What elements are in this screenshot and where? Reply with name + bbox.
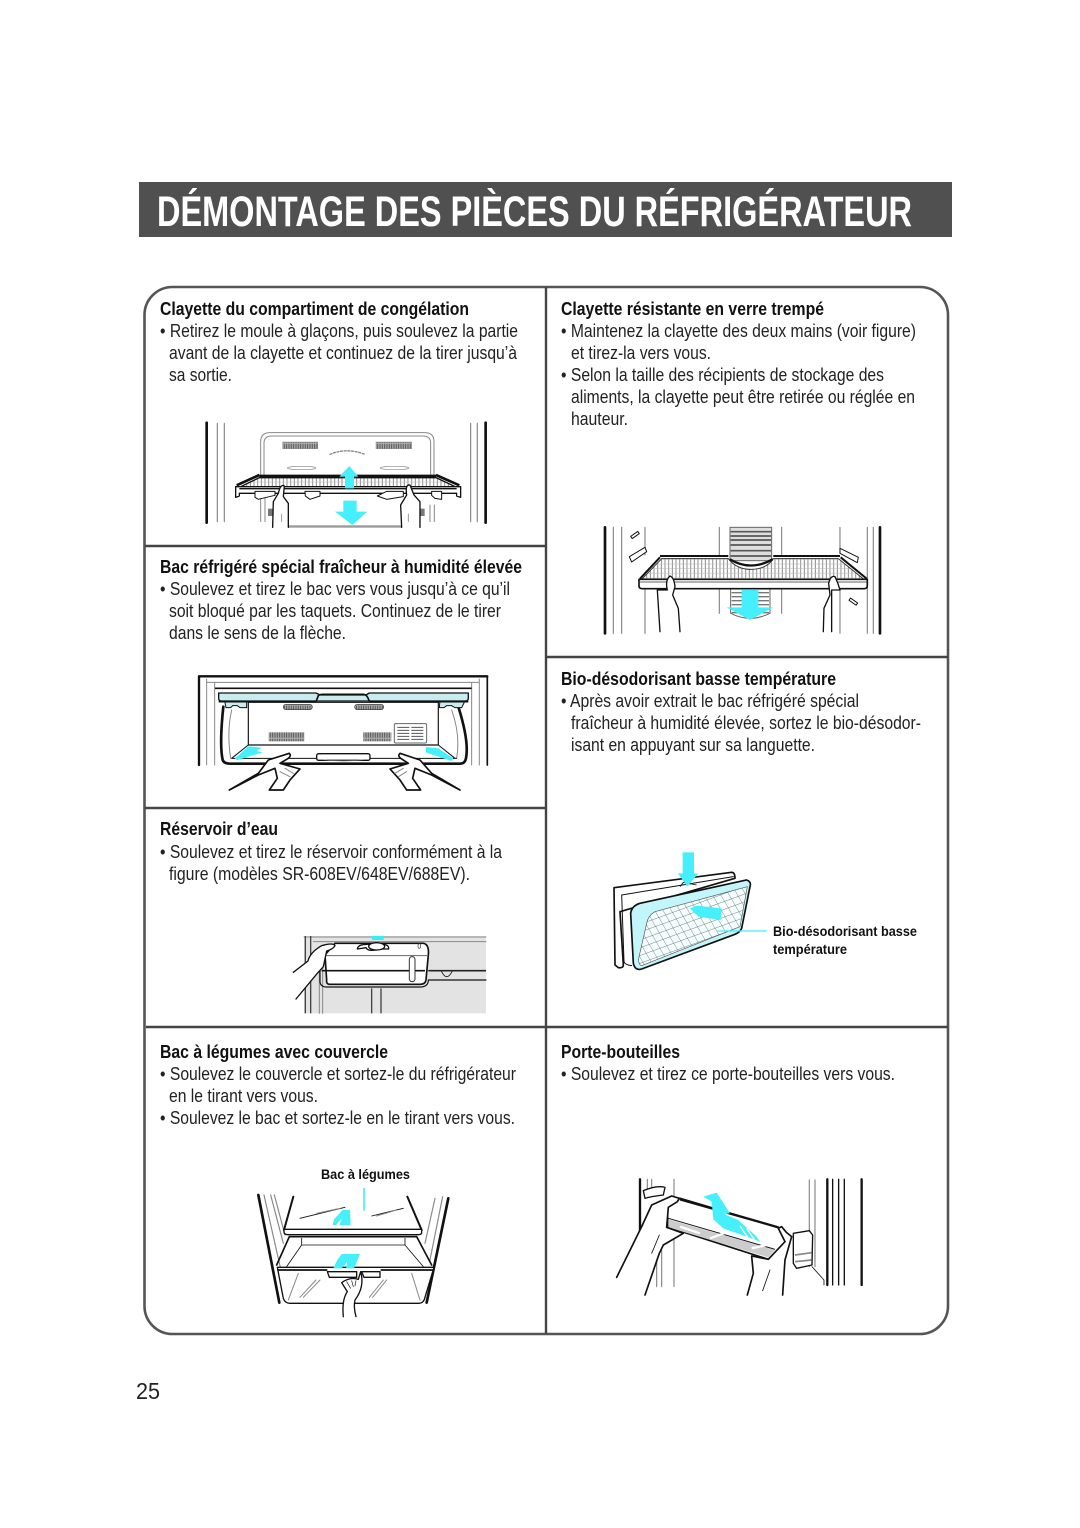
- text block: crisper bin instructions: dans le sens de la flèche.: [169, 623, 346, 643]
- text block: vegetable drawer instructions: • Soulevez le couvercle et sortez-le du réfrigérateur: [160, 1064, 516, 1084]
- panel: bottle holder: [561, 1042, 895, 1295]
- callout: vegetable drawer label: Bac à légumes: [321, 1166, 410, 1182]
- text block: water tank instructions: [160, 842, 503, 884]
- heading: freezer shelf: Clayette du compartiment de congélation: [160, 299, 469, 319]
- panel: freezer shelf: [160, 299, 518, 528]
- page number: 25: [136, 1378, 160, 1404]
- panel: crisper bin: [160, 557, 522, 790]
- heading: glass shelf: Clayette résistante en verre trempé: [561, 299, 824, 319]
- text block: glass shelf instructions: hauteur.: [571, 409, 628, 429]
- illustration: bottle holder: [617, 1179, 862, 1295]
- callout: bio-deodorizer label: Bio-désodorisant basse: [773, 923, 917, 939]
- panel: vegetable drawer: [160, 1042, 516, 1317]
- text block: freezer shelf instructions: avant de la clayette et continuez de la tirer jusqu’à: [169, 343, 518, 363]
- text block: vegetable drawer instructions: en le tirant vers vous.: [169, 1086, 318, 1106]
- text block: crisper bin instructions: • Soulevez et tirez le bac vers vous jusqu’à ce qu’il: [160, 579, 510, 599]
- heading: water tank: Réservoir d’eau: [160, 819, 278, 839]
- text block: glass shelf instructions: [561, 321, 916, 429]
- illustration: freezer shelf: [207, 423, 486, 528]
- text block: crisper bin instructions: soit bloqué par les taquets. Continuez de le tirer: [169, 601, 501, 621]
- text block: glass shelf instructions: aliments, la clayette peut être retirée ou réglée en: [571, 387, 915, 407]
- text block: bottle holder instructions: • Soulevez et tirez ce porte-bouteilles vers vous.: [561, 1064, 895, 1084]
- text block: water tank instructions: • Soulevez et tirez le réservoir conformément à la: [160, 842, 503, 862]
- illustration: crisper bin: [199, 676, 487, 790]
- text block: freezer shelf instructions: sa sortie.: [169, 365, 232, 385]
- panel frame: [144, 287, 948, 1334]
- callout: bio-deodorizer label: température: [773, 941, 847, 957]
- text block: glass shelf instructions: • Selon la taille des récipients de stockage des: [561, 365, 884, 385]
- panel: water tank: [160, 819, 503, 1013]
- illustration: bio-deodorizer: [614, 852, 767, 969]
- panel: bio-deodorizer: [561, 669, 921, 969]
- illustration: vegetable drawer: [258, 1188, 448, 1317]
- text block: freezer shelf instructions: [160, 321, 518, 385]
- text block: vegetable drawer instructions: • Soulevez le bac et sortez-le en le tirant vers vous.: [160, 1108, 515, 1128]
- text block: vegetable drawer instructions: [160, 1064, 516, 1128]
- heading: crisper bin: Bac réfrigéré spécial fraîcheur à humidité élevée: [160, 557, 522, 577]
- heading: vegetable drawer: Bac à légumes avec couvercle: [160, 1042, 388, 1062]
- heading: bio-deodorizer: Bio-désodorisant basse température: [561, 669, 836, 689]
- text block: water tank instructions: figure (modèles SR-608EV/648EV/688EV).: [169, 864, 470, 884]
- text block: bio-deodorizer instructions: [561, 691, 921, 755]
- illustration: glass shelf: [605, 527, 880, 633]
- text block: bio-deodorizer instructions: fraîcheur à humidité élevée, sortez le bio-désodor-: [571, 713, 921, 733]
- callout: bio-deodorizer label: [773, 923, 917, 957]
- text block: glass shelf instructions: • Maintenez la clayette des deux mains (voir figure): [561, 321, 916, 341]
- panel: glass shelf: [561, 299, 916, 633]
- illustration: water tank: [293, 936, 486, 1013]
- text block: bio-deodorizer instructions: • Après avoir extrait le bac réfrigéré spécial: [561, 691, 859, 711]
- text block: freezer shelf instructions: • Retirez le moule à glaçons, puis soulevez la partie: [160, 321, 518, 341]
- text block: crisper bin instructions: [160, 579, 510, 643]
- text block: bio-deodorizer instructions: isant en appuyant sur sa languette.: [571, 735, 815, 755]
- heading: bottle holder: Porte-bouteilles: [561, 1042, 680, 1062]
- text block: glass shelf instructions: et tirez-la vers vous.: [571, 343, 711, 363]
